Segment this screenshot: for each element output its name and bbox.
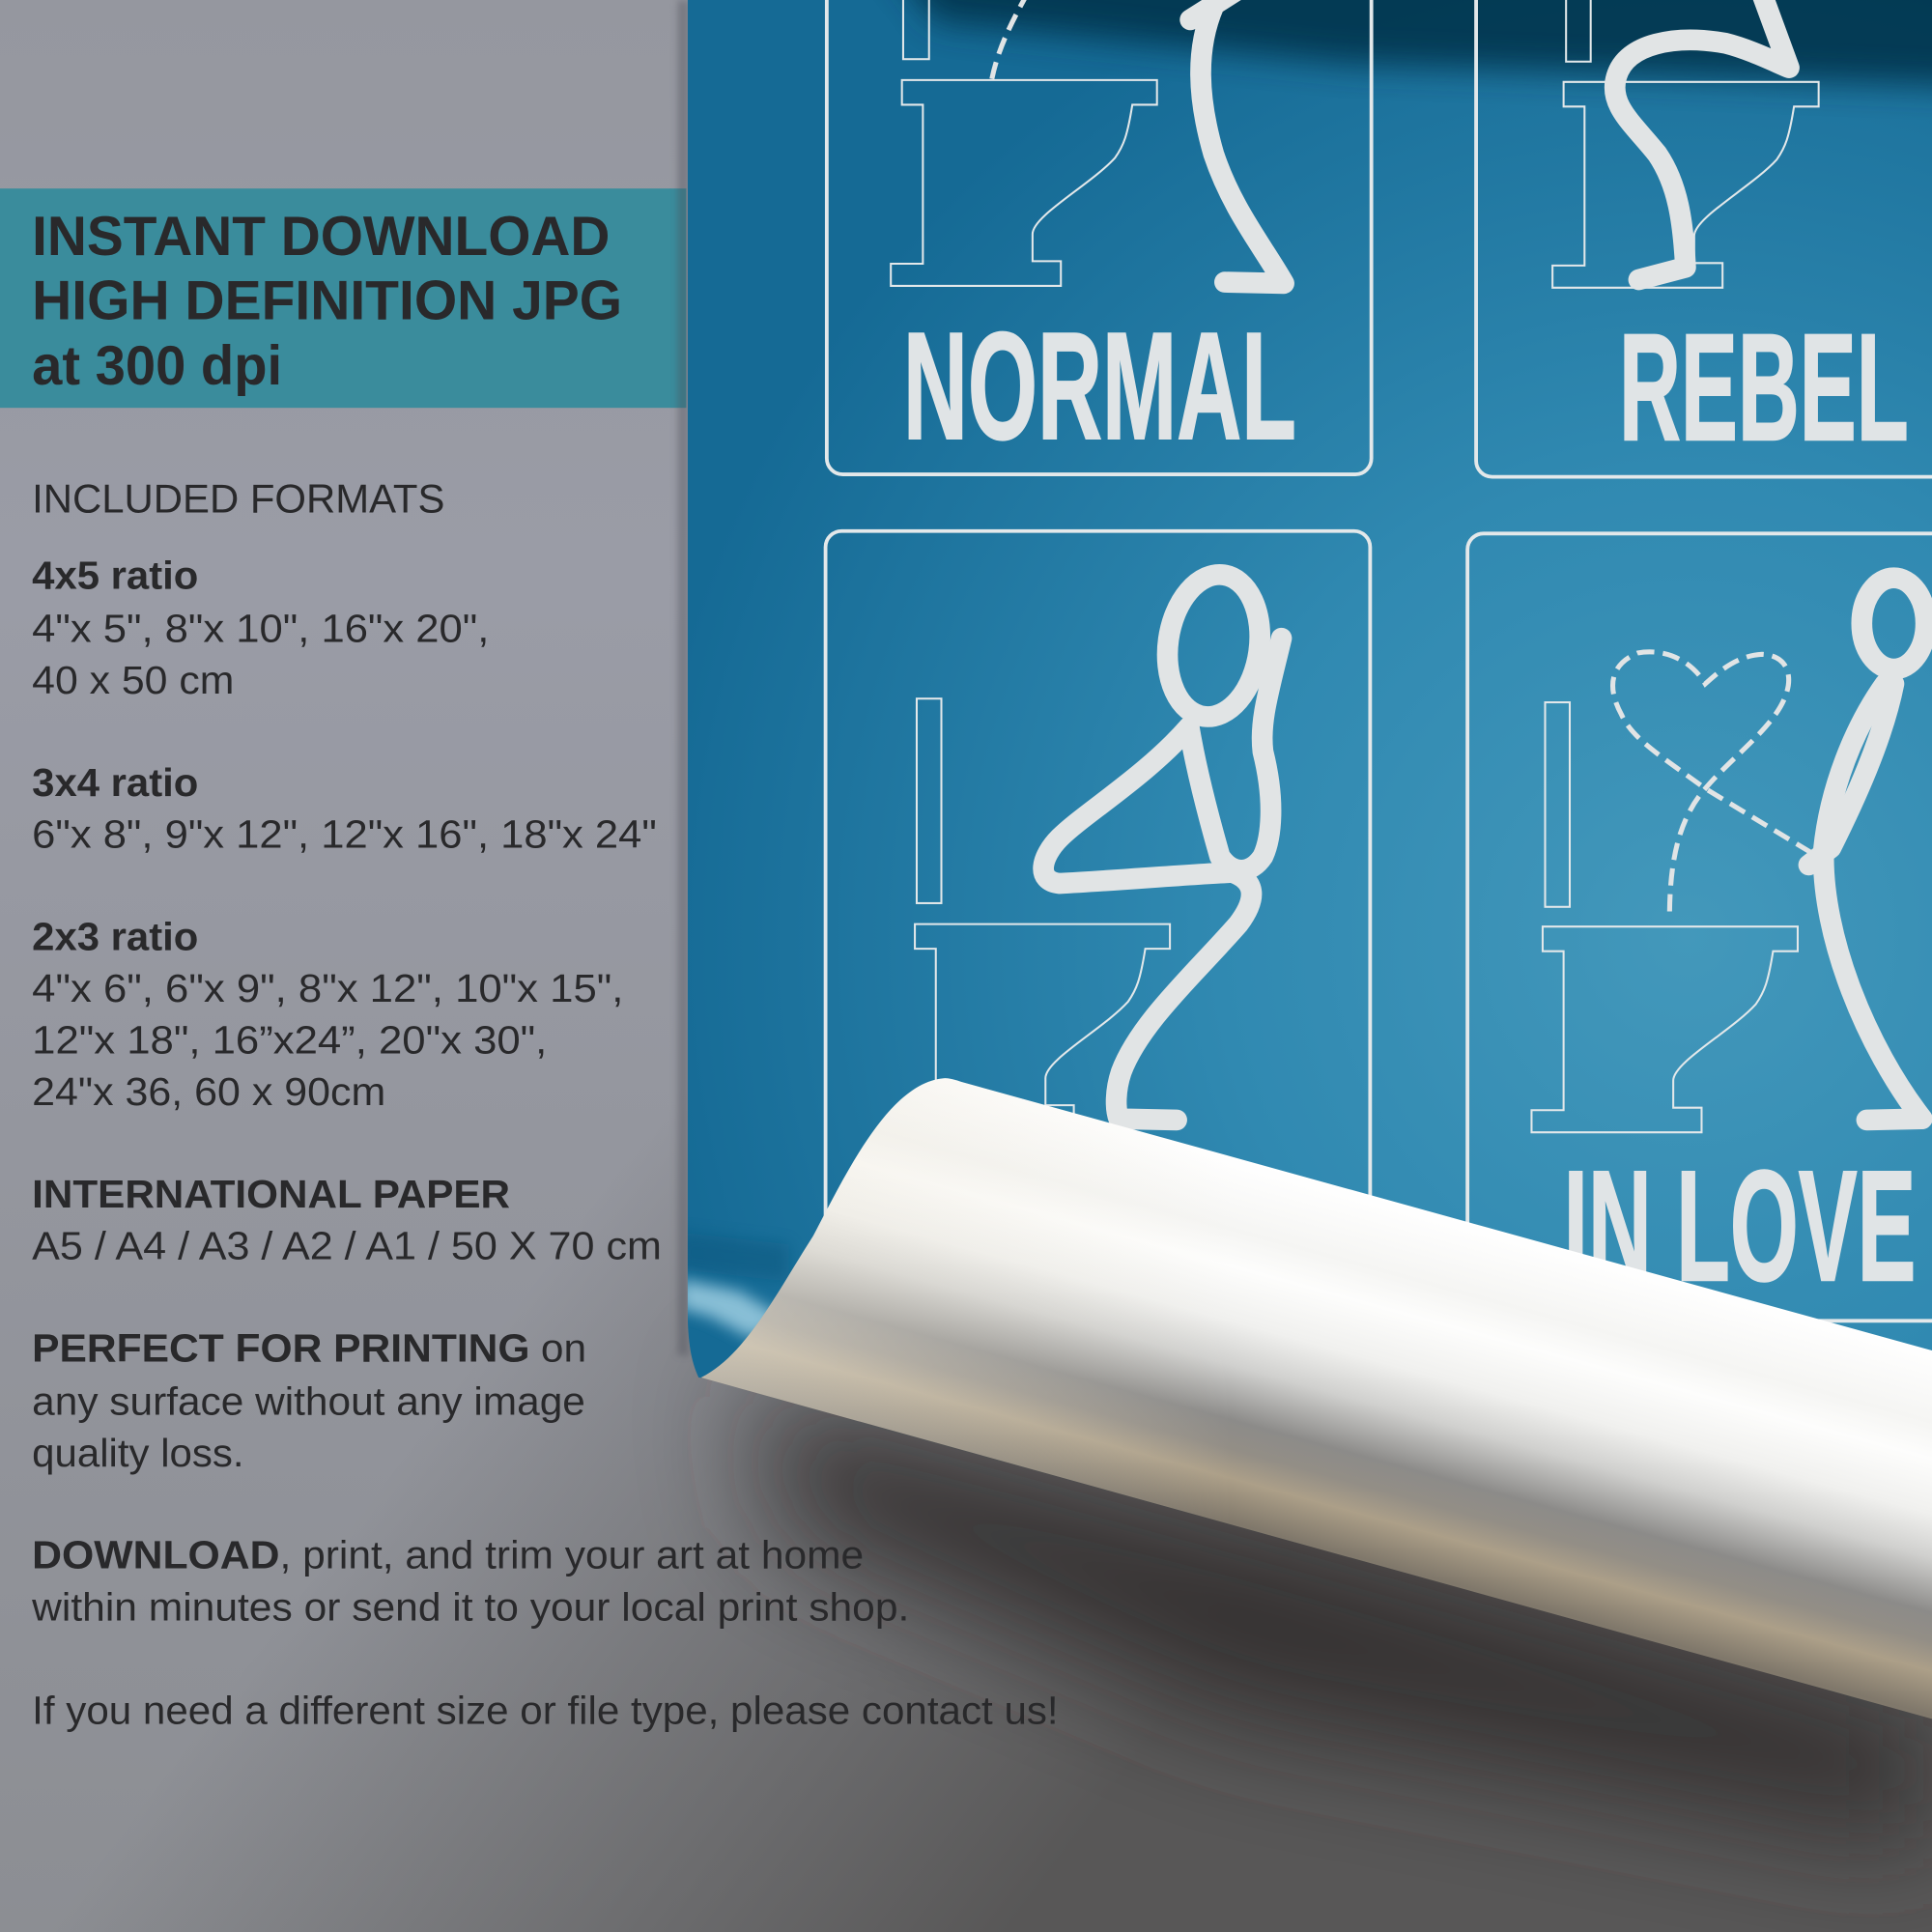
banner heading: INSTANT DOWNLOAD — [32, 206, 610, 268]
panel: poster sheet — [678, 0, 1932, 1479]
text block: 3x4 ratio — [32, 760, 657, 857]
panel: normal — [827, 0, 1372, 474]
label: normal: NORMAL — [903, 300, 1296, 471]
icon: toilet tank — [903, 0, 929, 59]
icon: dashed stream — [992, 0, 1025, 79]
text block: 4x5 ratio: 4"x 5", 8"x 10", 16"x 20", — [32, 607, 489, 651]
icon: toilet bowl — [891, 80, 1157, 286]
poster sheen near curl — [678, 1233, 788, 1338]
icon: standing figure — [1190, 0, 1284, 283]
text block: download — [31, 1533, 909, 1629]
icon: toilet tank — [1566, 0, 1591, 62]
text block: download: DOWNLOAD — [32, 1533, 280, 1577]
panel: thinker — [826, 531, 1370, 1320]
banner heading: at 300 dpi — [32, 335, 282, 397]
panel: rebel — [1476, 0, 1932, 477]
text block: download: within minutes or send it to your local print shop. — [31, 1584, 909, 1629]
banner heading: HIGH DEFINITION JPG — [32, 270, 622, 331]
text block: 2x3 ratio — [32, 914, 623, 1114]
text block: 2x3 ratio: 12"x 18", 16”x24”, 20"x 30", — [32, 1018, 547, 1063]
text block: 2x3 ratio: 24"x 36, 60 x 90cm — [32, 1069, 385, 1114]
icon: standing figure — [1808, 578, 1926, 1120]
icon: dashed heart stream — [1613, 652, 1811, 918]
banner heading — [32, 206, 622, 397]
icon: toilet bowl — [1531, 926, 1798, 1132]
text block: perfect for printing — [32, 1325, 586, 1475]
icon: toilet tank — [917, 698, 941, 903]
text block: perfect for printing: any surface without any image — [32, 1378, 585, 1423]
text block: contact: If you need a different size or file type, please contact us! — [32, 1688, 1059, 1732]
icon: toilet tank — [1545, 702, 1570, 907]
poster curl — [701, 1078, 1932, 1744]
text block: 2x3 ratio: 2x3 ratio — [32, 914, 198, 958]
text block: international paper: A5 / A4 / A3 / A2 / A1 / 50 X 70 cm — [32, 1224, 662, 1268]
text block: perfect for printing: PERFECT FOR PRINTING — [32, 1325, 529, 1370]
teal banner — [0, 188, 686, 408]
text block: 3x4 ratio: 6"x 8", 9"x 12", 12"x 16", 18"x 24" — [32, 812, 657, 857]
text block: international paper — [32, 1172, 662, 1268]
text block: 4x5 ratio: 4x5 ratio — [32, 554, 198, 598]
text block: perfect for printing: quality loss. — [32, 1431, 244, 1475]
icon: toilet bowl — [904, 924, 1170, 1130]
top shadow band — [863, 0, 1932, 86]
included formats heading: INCLUDED FORMATS — [32, 476, 444, 522]
icon: toilet bowl — [1552, 82, 1819, 288]
panel: in love — [1467, 533, 1932, 1321]
text block: 3x4 ratio: 3x4 ratio — [32, 760, 198, 805]
text block: perfect for printing: on — [541, 1325, 586, 1370]
poster edge shadow — [678, 0, 689, 1355]
text block: download: , print, and trim your art at home — [280, 1533, 864, 1577]
text block: 4x5 ratio: 40 x 50 cm — [32, 658, 234, 702]
text block: 4x5 ratio — [32, 554, 489, 702]
icon: figure on toilet — [1615, 0, 1789, 280]
icon: seated figure — [1043, 569, 1282, 1120]
text block: 2x3 ratio: 4"x 6", 6"x 9", 8"x 12", 10"x 15", — [32, 966, 623, 1010]
text block: international paper: INTERNATIONAL PAPER — [32, 1172, 510, 1216]
